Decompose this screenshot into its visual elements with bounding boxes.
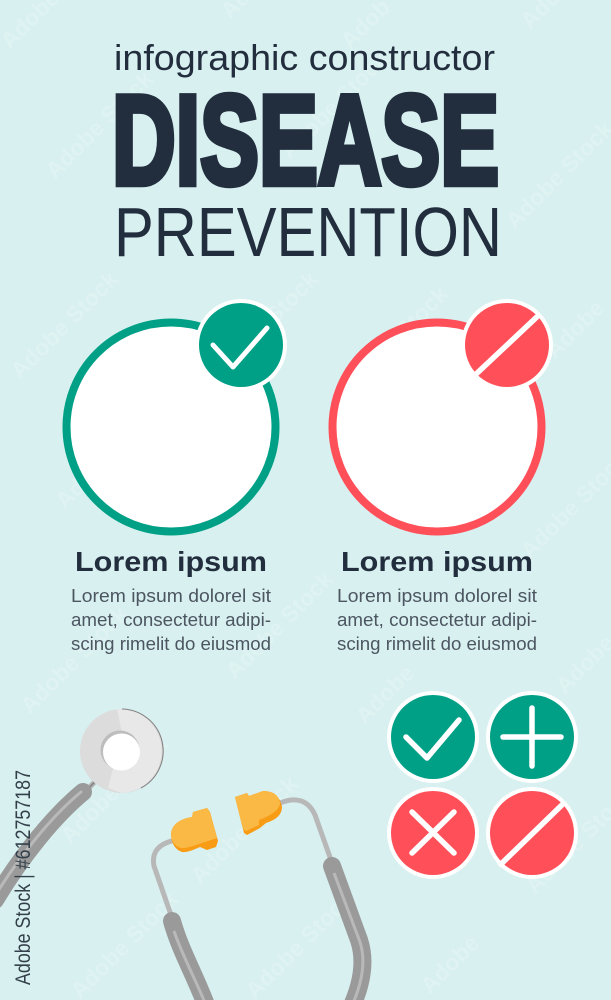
watermark pattern: Adobe Stock	[275, 46, 393, 164]
stethoscope: right ear tip	[235, 791, 282, 835]
text block: right: Lorem ipsum dolorel sit	[337, 586, 537, 606]
watermark pattern: Adobe Stock	[40, 66, 158, 184]
watermark pattern: Adobe Stock	[50, 396, 168, 514]
icon: plus	[486, 691, 578, 783]
title line: PREVENTION: PREVENTION	[114, 193, 502, 271]
icon: slash	[486, 787, 578, 879]
watermark pattern: Adobe Stock	[185, 771, 303, 889]
watermark id text: Adobe Stock | #612757187	[12, 770, 35, 985]
watermark pattern: Adobe	[350, 660, 419, 729]
title line: infographic constructor: infographic constructor	[114, 37, 495, 78]
panel: do	[66, 299, 287, 654]
text block: right	[337, 586, 537, 654]
icon: check badge	[195, 299, 287, 391]
heading: left: Lorem ipsum	[75, 546, 267, 577]
text block: left: Lorem ipsum dolorel sit	[71, 586, 271, 606]
icon: check	[387, 691, 479, 783]
watermark pattern: Adobe Stock	[380, 416, 498, 534]
watermark pattern: Adobe Stock	[15, 601, 133, 719]
text block: right: scing rimelit do eiusmod	[337, 634, 537, 654]
watermark pattern: Adobe Stock	[335, 281, 453, 399]
stethoscope: left ear tip	[171, 808, 218, 852]
watermark pattern: Adobe Stock	[205, 266, 323, 384]
watermark pattern: Adobe	[415, 930, 484, 999]
watermark pattern: Adobe Stock	[220, 566, 338, 684]
icon: prohibited badge	[461, 299, 553, 391]
icon set	[387, 691, 578, 879]
watermark pattern: Adobe	[540, 295, 609, 364]
panel: don't	[332, 299, 553, 654]
heading: right: Lorem ipsum	[341, 546, 533, 577]
stethoscope: binaural tubes	[153, 800, 363, 1000]
text block: left	[71, 586, 271, 654]
text block: left: amet, consectetur adipi-	[71, 610, 271, 630]
text block: right: amet, consectetur adipi-	[337, 610, 537, 630]
text block: left: scing rimelit do eiusmod	[71, 634, 271, 654]
title block	[112, 37, 502, 271]
watermark pattern: Adobe Stock	[5, 266, 123, 384]
stethoscope: chest piece and tube	[0, 709, 164, 900]
watermark pattern: Adobe Stock	[55, 731, 173, 849]
icon: cross	[387, 787, 479, 879]
circle: teal ring	[66, 322, 276, 532]
circle: red ring	[332, 322, 542, 532]
